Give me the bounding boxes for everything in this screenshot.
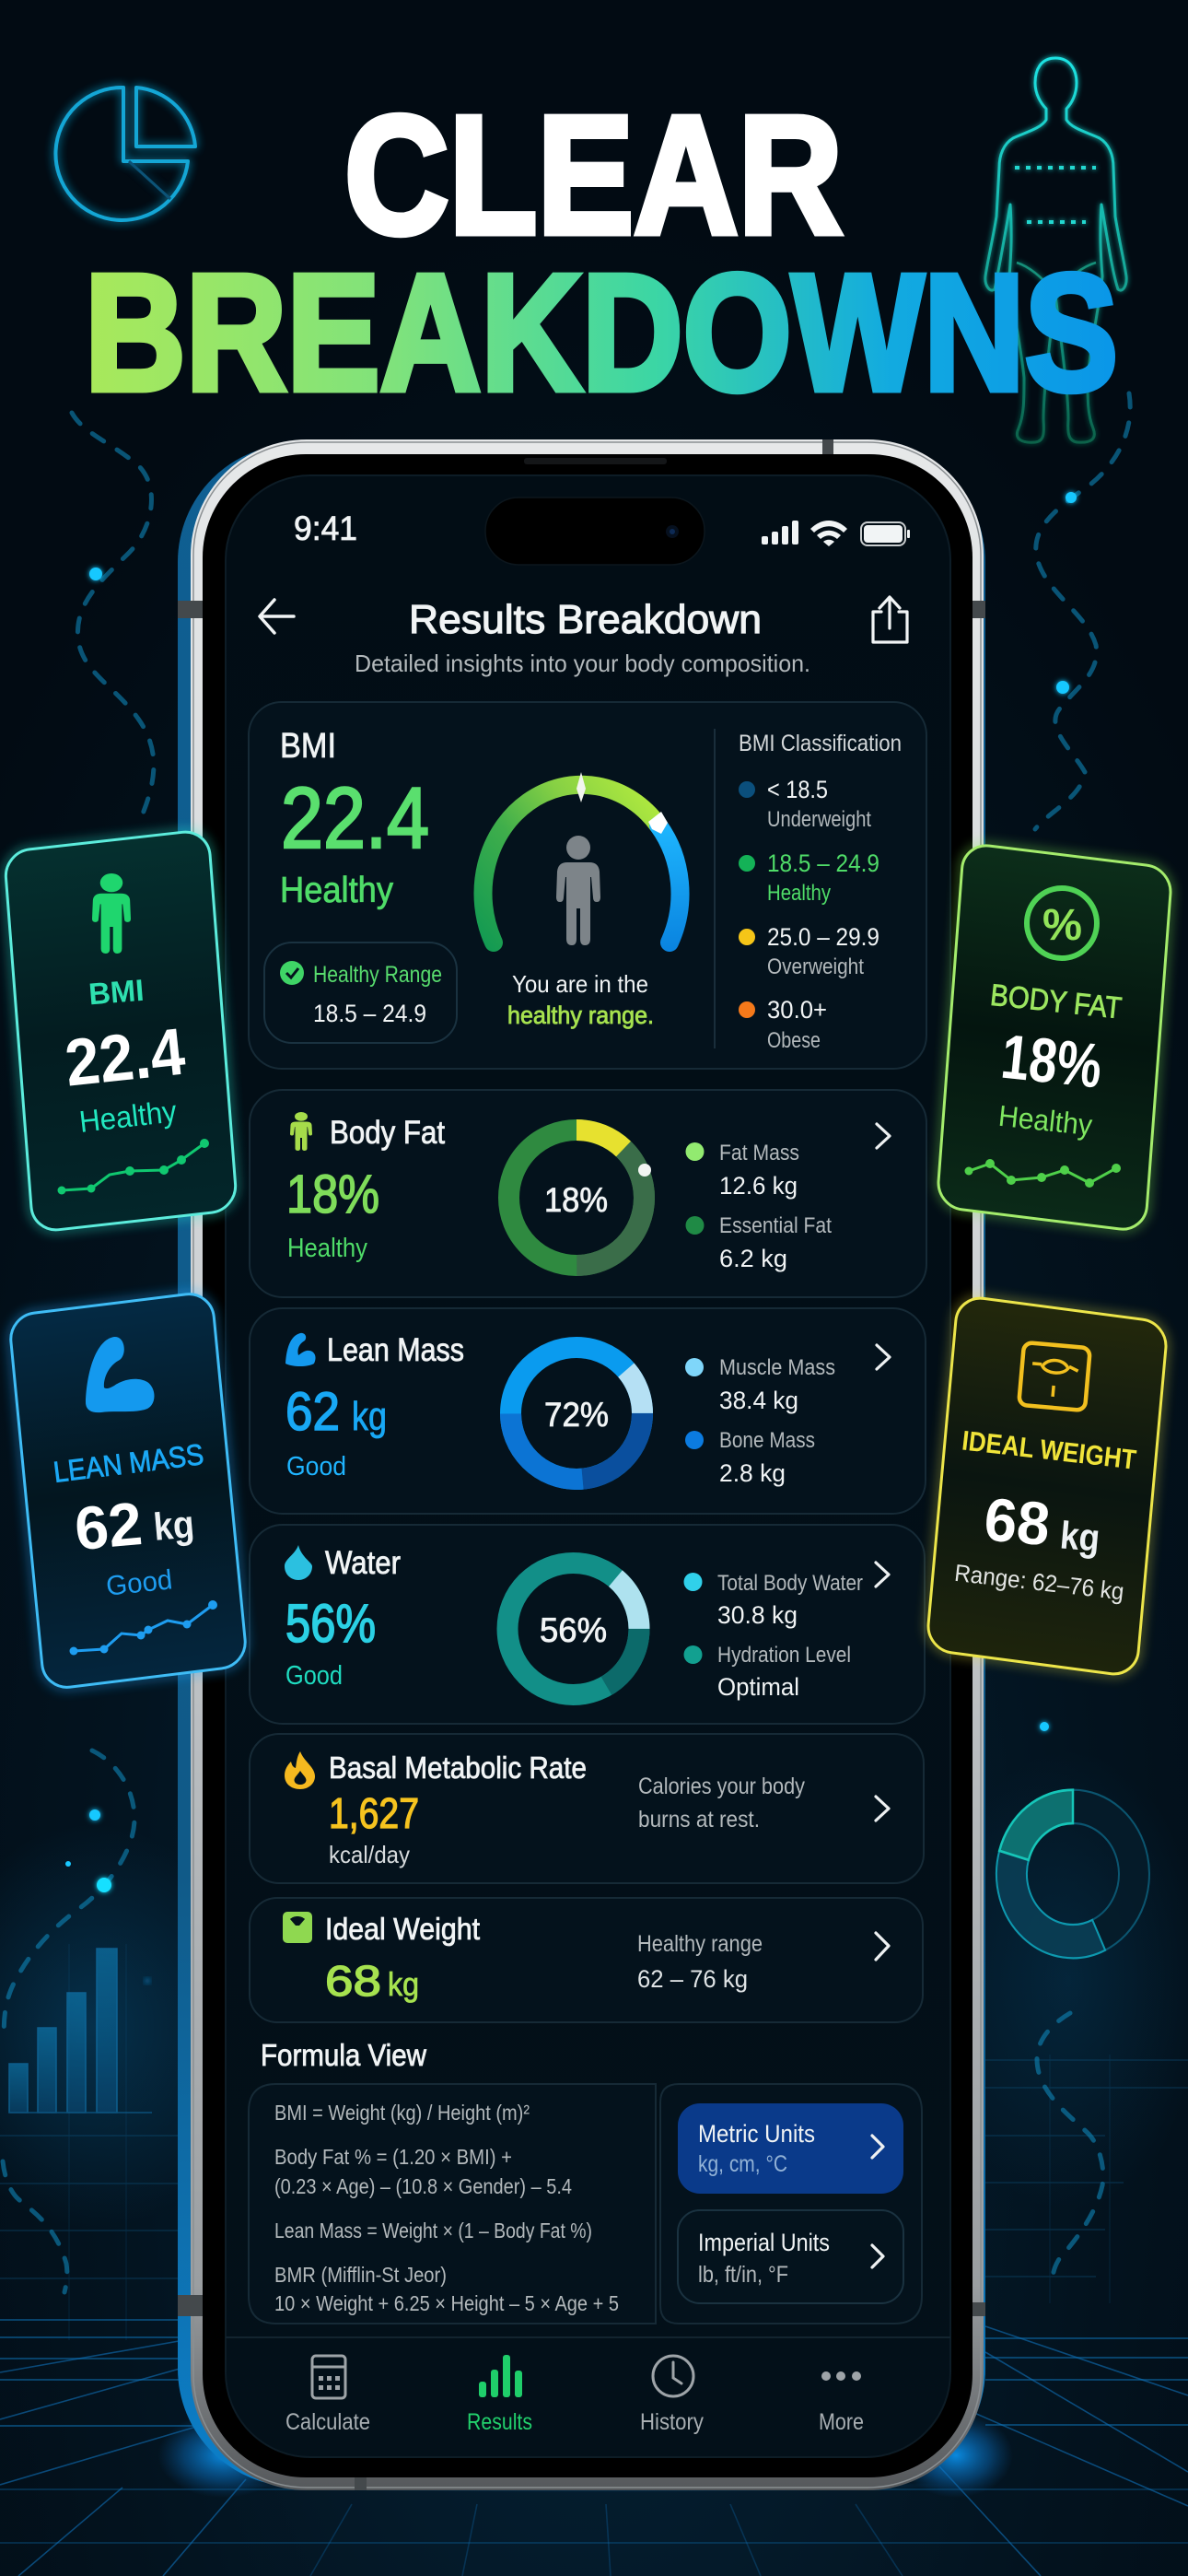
BMI classification legend [739,731,902,1053]
label: BMI [87,973,146,1011]
icon: weighing scale [1019,1342,1090,1411]
donut: lean mass [510,1347,643,1480]
Water heading: Water [325,1545,401,1581]
label: LEAN MASS [52,1437,205,1489]
BMI classification legend: Overweight [767,954,864,979]
Water legend: Total Body Water [717,1571,863,1596]
label: BODY FAT [989,978,1124,1025]
panel: formulas: Lean Mass = Weight × (1 – Body Fat %) [274,2219,592,2242]
icon: percent [1027,888,1097,958]
gauge caption [507,970,654,1029]
value: 68 [982,1484,1053,1558]
decorative dashed path and dots: lower right [1037,1722,1103,2279]
BMR unit: kcal/day [329,1841,410,1868]
title: CLEAR: CLEAR [344,80,843,269]
Lean Mass status: Good [286,1452,346,1481]
BMI classification legend: Obese [767,1028,821,1053]
Ideal Weight range: 62 – 76 kg [637,1965,748,1993]
Body Fat legend [685,1141,832,1272]
BMI classification legend: 18.5 – 24.9 [767,849,879,877]
icon: percent: % [1042,901,1082,950]
gauge caption: healthy range. [507,1001,654,1029]
Lean Mass legend: 2.8 kg [719,1459,786,1487]
BMI classification legend: BMI Classification [739,731,902,756]
button: Imperial Units: lb, ft/in, °F [698,2262,788,2288]
Body Fat status: Healthy [287,1234,367,1263]
Body Fat heading: Body Fat [330,1115,445,1151]
panel: Ideal Weight [250,1898,923,2022]
panel: formulas: (0.23 × Age) – (10.8 × Gender) – 5.4 [274,2174,572,2198]
sparkline [70,1600,217,1655]
value: 18% [998,1022,1105,1102]
status bar icons [762,521,910,546]
tab: History [640,2356,704,2435]
range: Range: 62–76 kg [953,1559,1125,1605]
Water legend: Optimal [717,1673,799,1701]
Lean Mass legend: Bone Mass [719,1428,815,1453]
icon: person [92,873,131,954]
BMI status: Healthy [280,871,393,910]
icon: bicep [86,1337,155,1412]
icon: bicep [285,1333,316,1366]
Water status: Good [285,1661,343,1691]
chevron [877,1345,890,1369]
panel: Basal Metabolic Rate [250,1734,924,1883]
decorative dashed paths and glow dots: upper left [72,413,154,825]
Lean Mass legend [685,1355,835,1487]
sparkline [57,1139,209,1194]
panel: Water [250,1525,925,1724]
BMI classification legend: 25.0 – 29.9 [767,923,879,951]
gauge [483,772,680,943]
panel: formulas: 10 × Weight + 6.25 × Height – 5 × Age + 5 [274,2291,619,2315]
Ideal Weight value: 68 [325,1957,381,2005]
unit: kg [1058,1513,1101,1560]
Body Fat value: 18% [286,1165,379,1224]
tab: Results: Results [467,2409,532,2435]
tab: Calculate [285,2356,370,2435]
healthy range box [264,943,457,1043]
donut: water [507,1563,639,1695]
Water value: 56% [285,1594,376,1654]
Body Fat legend: 6.2 kg [719,1245,787,1272]
healthy range box: Healthy Range [313,962,442,988]
BMI classification legend: Underweight [767,807,871,832]
Lean Mass heading: Lean Mass [327,1332,464,1368]
icon: flame [285,1751,315,1789]
floating card: Lean Mass [8,1291,248,1691]
chevron [876,1563,889,1587]
heading: Results Breakdown: Results Breakdown [409,597,762,642]
phone frame [178,439,985,2490]
button: Imperial Units [678,2210,903,2303]
value: 62 [72,1489,145,1563]
value: 22.4 [62,1015,189,1101]
status: Healthy [997,1099,1094,1142]
status: Good [105,1564,174,1602]
background grid and floor [0,1751,1188,2576]
floating card: BMI [4,829,238,1233]
chevron [877,1124,890,1148]
BMR description: burns at rest. [638,1807,760,1832]
share icon [873,597,907,642]
subtitle: Detailed insights into your body composition. [355,650,810,677]
panel: formulas [249,2084,656,2324]
healthy range box: 18.5 – 24.9 [313,1000,426,1027]
panel: Body Fat [250,1090,926,1297]
icon: person [556,836,600,945]
donut: body fat: 18% [544,1181,608,1219]
icon: pie chart outline [55,88,195,220]
Lean Mass unit: kg [352,1394,387,1439]
unit: kg [152,1502,196,1549]
Lean Mass legend: 38.4 kg [719,1387,798,1414]
Ideal Weight unit: kg [388,1965,419,2003]
dynamic island [485,498,705,565]
Lean Mass value: 62 [285,1382,340,1442]
phone [178,439,985,2490]
Ideal Weight heading: Ideal Weight [325,1912,480,1946]
button: Metric Units: Metric Units [698,2120,815,2148]
Body Fat legend: Essential Fat [719,1213,832,1238]
donut: water: 56% [540,1611,607,1649]
Lean Mass legend: Muscle Mass [719,1355,835,1380]
BMR heading: Basal Metabolic Rate [329,1751,587,1785]
BMI heading: BMI [280,727,336,766]
icon: person lime [290,1112,312,1151]
label: IDEAL WEIGHT [961,1425,1137,1476]
tab: More [819,2371,864,2435]
icon: water drop [285,1545,312,1580]
decorative dashed paths and glow dots: upper right [1035,393,1130,829]
Ideal Weight range: Healthy range [637,1931,763,1957]
panel: Lean Mass [250,1308,926,1514]
panel: formulas: Body Fat % = (1.20 × BMI) + [274,2145,512,2169]
back arrow [260,600,294,633]
decorative donut chart: lower right [996,1790,1149,1958]
Water legend [683,1571,863,1701]
Ideal Weight range [637,1931,763,1993]
status: Healthy [77,1094,179,1139]
panel: BMI [249,702,926,1069]
BMI value: 22.4 [281,769,429,866]
floating card: Ideal Weight [926,1295,1168,1677]
button: Metric Units: kg, cm, °C [698,2151,787,2177]
BMR value: 1,627 [329,1789,419,1837]
BMR description: Calories your body [638,1774,805,1799]
chevron [876,1933,889,1960]
tab: Calculate: Calculate [285,2409,370,2435]
button: Imperial Units: Imperial Units [698,2229,830,2256]
Body Fat legend: Fat Mass [719,1141,799,1165]
Water legend: 30.8 kg [717,1601,798,1629]
heading: Formula View: Formula View [261,2038,426,2072]
floating card: Body Fat [937,843,1172,1232]
tab: More: More [819,2409,864,2435]
button: Metric Units [678,2103,903,2194]
donut: body fat [508,1130,651,1266]
panel: formulas: BMR (Mifflin-St Jeor) [274,2263,447,2287]
gauge caption: You are in the [512,970,648,998]
icon: human body outline [985,58,1126,442]
panel: units [660,2084,922,2324]
tab: Results [467,2355,532,2435]
chevron [876,1797,889,1821]
BMR description [638,1774,805,1832]
donut: lean mass: 72% [544,1396,609,1434]
Water legend: Hydration Level [717,1643,851,1668]
decorative dashed paths and glow dots: lower left [3,1751,150,2292]
bar chart: decorative growth bars [9,1949,152,2113]
sparkline [965,1159,1121,1188]
icon: scale [283,1912,312,1943]
panel: formulas: BMI = Weight (kg) / Height (m)² [274,2101,530,2125]
tab: History: History [640,2409,704,2435]
BMI classification legend: Healthy [767,881,831,906]
phone screen [226,475,950,2457]
BMI classification legend: < 18.5 [767,776,828,803]
status bar time: 9:41 [294,509,357,547]
BMI classification legend: 30.0+ [767,996,827,1024]
Body Fat legend: 12.6 kg [719,1172,798,1200]
